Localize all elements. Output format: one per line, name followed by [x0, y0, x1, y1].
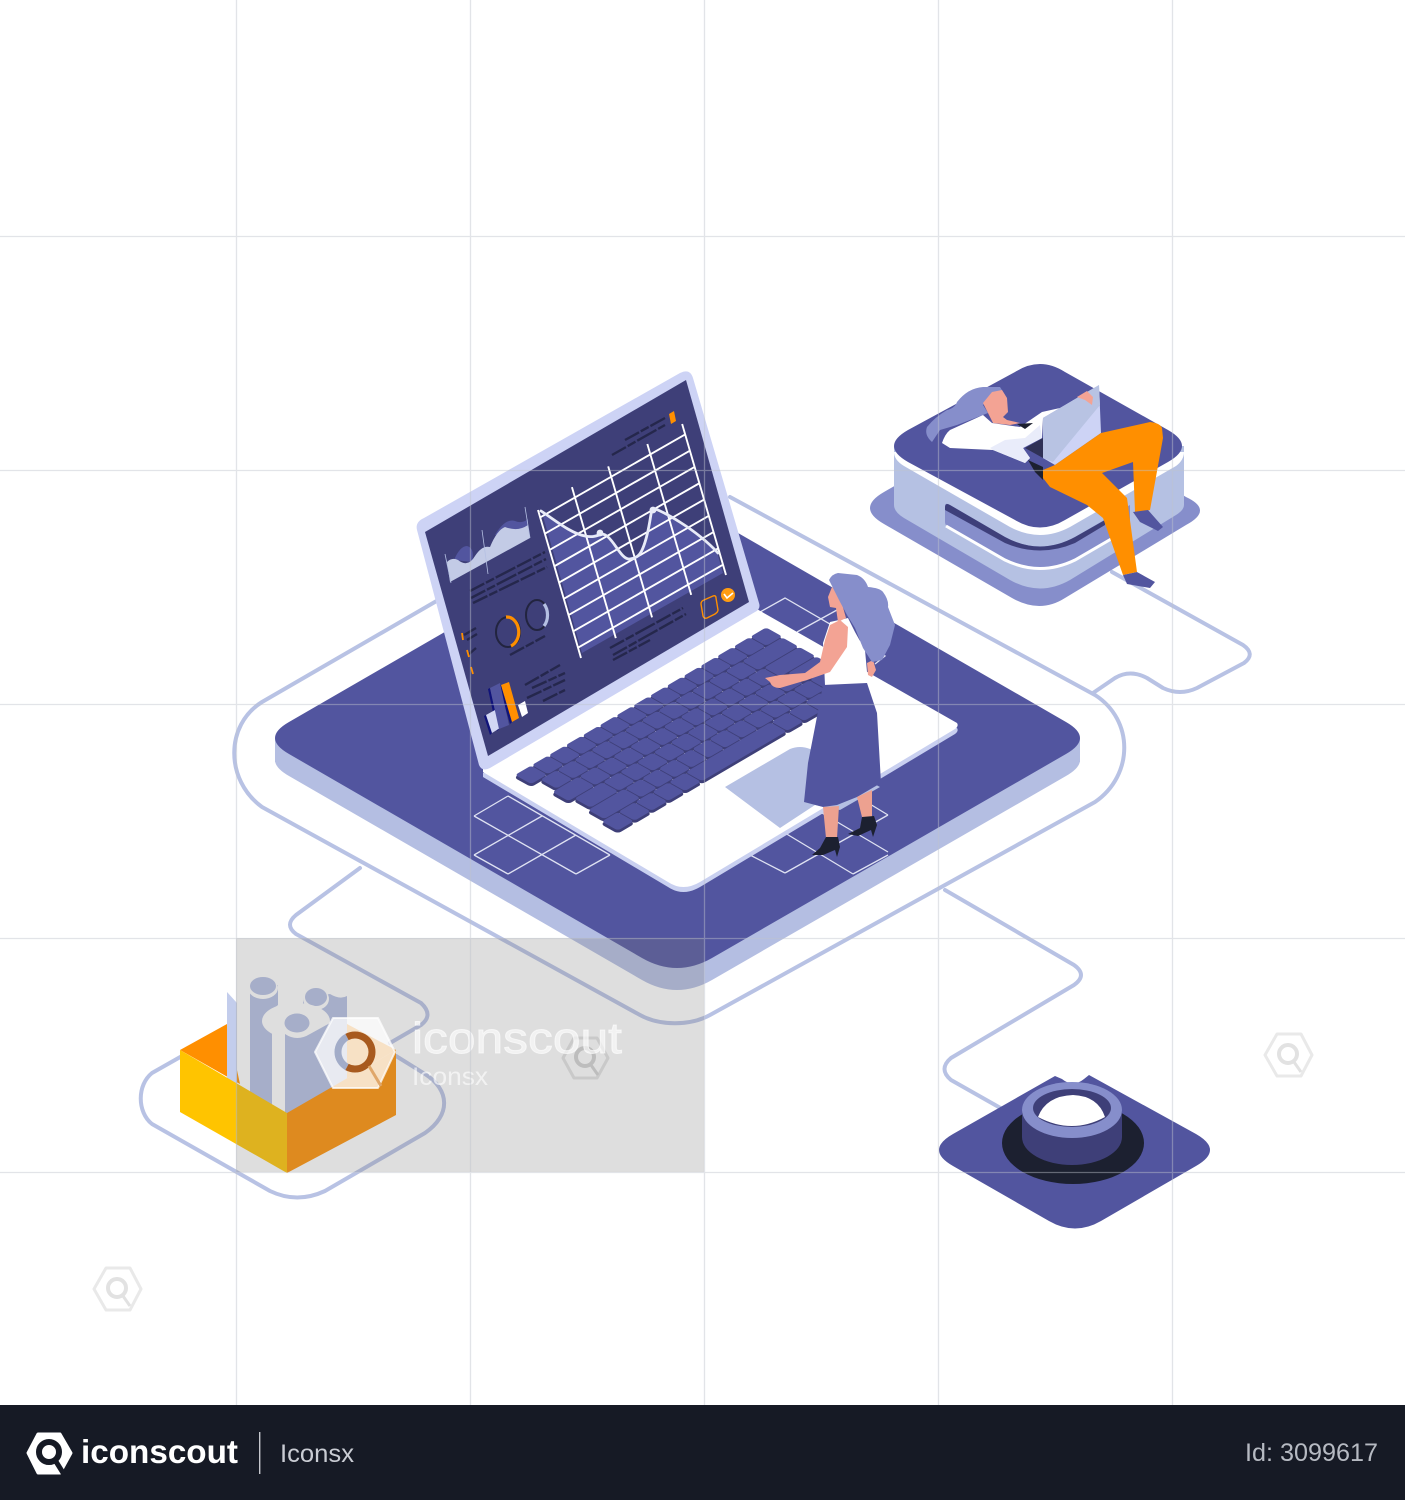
- footer brand name: iconscout: [81, 1433, 238, 1470]
- seated woman trousers: [1043, 422, 1163, 575]
- high-heeled boots: [812, 816, 877, 857]
- outline around main platform and connecting wire to bed: [234, 497, 1250, 1023]
- watermark author name: Iconsx: [412, 1063, 489, 1091]
- bed laptop screen: [1043, 385, 1101, 465]
- watermark brand name: iconscout: [412, 1014, 622, 1063]
- white top: [823, 618, 868, 686]
- keyboard: [515, 627, 867, 834]
- face and neck: [828, 587, 846, 622]
- seated woman socks: [1123, 510, 1163, 588]
- wire to materials box: [290, 868, 428, 1043]
- seated woman top detail: [1017, 423, 1043, 480]
- watermark hexagon right: [1265, 1034, 1312, 1076]
- check box and orange badge: [701, 588, 735, 618]
- box left face: [180, 1050, 287, 1173]
- bed laptop keyboard: [1025, 438, 1043, 458]
- footer divider: [259, 1432, 260, 1474]
- bar chart: [484, 682, 528, 735]
- socket dark ring: [1002, 1102, 1144, 1184]
- far arm: [867, 660, 876, 677]
- legend ticks: [462, 633, 473, 674]
- box right face: [287, 1050, 396, 1173]
- outline around materials box: [141, 1056, 444, 1198]
- screen text blocks: [464, 418, 686, 701]
- socket ring: [1022, 1082, 1122, 1138]
- bed white trim: [894, 452, 1184, 535]
- skirt: [804, 683, 881, 807]
- socket opening: [1033, 1089, 1111, 1127]
- central iconscout watermark logo: [315, 1018, 395, 1088]
- footer author name: Iconsx: [280, 1440, 354, 1468]
- watermark hexagon in panel: [563, 1038, 608, 1078]
- touchpad: [725, 747, 880, 828]
- wire to socket: [944, 890, 1081, 1110]
- donut gauges: [496, 600, 548, 647]
- laptop base: [483, 608, 958, 892]
- faint repeat watermarks: [94, 1034, 1312, 1310]
- seated woman shirt: [942, 408, 1060, 463]
- watermark hexagon lower left: [94, 1268, 141, 1310]
- floor grid lines: [474, 598, 888, 874]
- paper rolls: [227, 977, 347, 1120]
- grey watermark panel: [236, 938, 704, 1172]
- orange marker: [669, 411, 676, 424]
- legs: [823, 790, 872, 838]
- bed top: [894, 364, 1182, 528]
- seated woman face: [983, 390, 1020, 425]
- socket white dome: [1038, 1095, 1105, 1126]
- main platform: [275, 508, 1080, 990]
- box inner walls: [180, 1024, 396, 1113]
- bed base plate: [870, 415, 1200, 606]
- bed body: [894, 446, 1184, 588]
- small area chart: [445, 507, 530, 583]
- socket platform: [939, 1075, 1210, 1228]
- bed platform with seated woman: [870, 364, 1200, 606]
- materials box: [180, 977, 396, 1173]
- main line chart: [537, 424, 726, 658]
- footer logo: [28, 1434, 71, 1476]
- socket cylinder: [1022, 1110, 1122, 1165]
- laptop screen: [425, 380, 749, 756]
- bed slot: [945, 504, 1130, 569]
- seated woman hair: [926, 387, 1005, 442]
- footer bar: [0, 1405, 1405, 1500]
- seated woman hand: [1077, 391, 1093, 405]
- footer asset id: Id: 3099617: [1245, 1439, 1378, 1467]
- near arm: [765, 620, 848, 688]
- standing woman: [765, 573, 895, 857]
- laptop screen bezel: [417, 371, 760, 769]
- socket base: [939, 1075, 1210, 1228]
- hair: [829, 573, 895, 662]
- main laptop: [417, 371, 958, 892]
